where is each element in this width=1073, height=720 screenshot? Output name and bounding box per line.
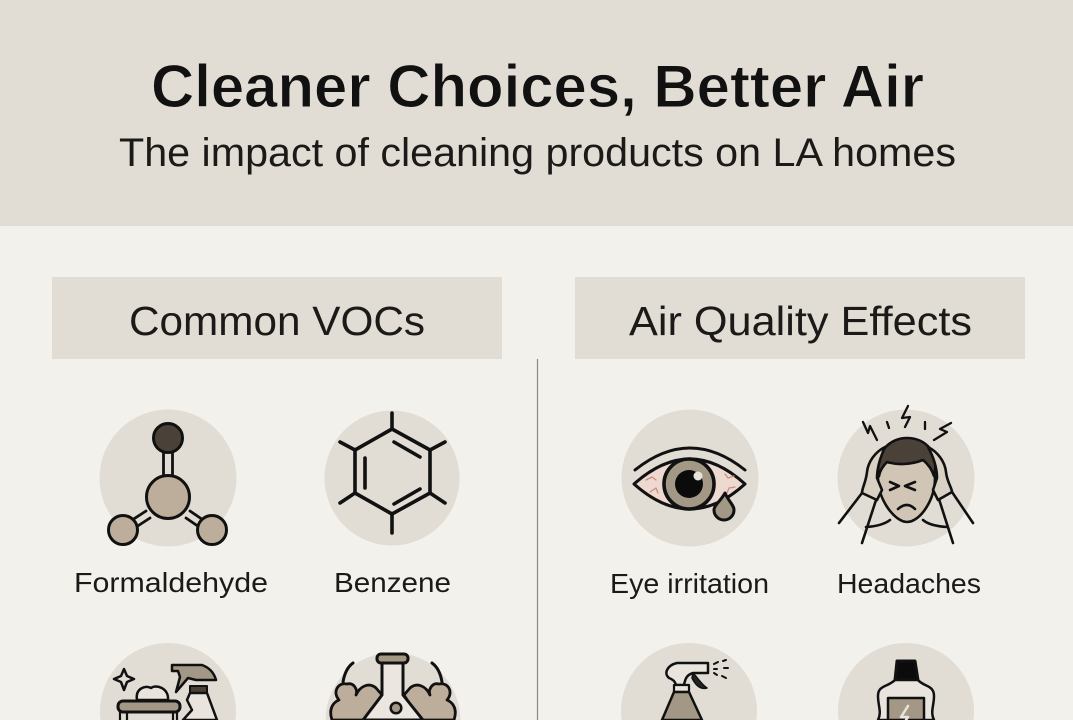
label: Benzene: Benzene bbox=[334, 567, 451, 598]
subtitle: The impact of cleaning products on LA homes bbox=[119, 131, 956, 175]
label: Formaldehyde: Formaldehyde bbox=[74, 567, 268, 598]
icon: irritated eye bbox=[622, 410, 758, 546]
panel heading: Common VOCs: Common VOCs bbox=[129, 298, 425, 344]
icon: formaldehyde molecule bbox=[100, 410, 236, 546]
label: Eye irritation: Eye irritation bbox=[610, 568, 769, 599]
panel heading: Common VOCs bbox=[52, 277, 502, 359]
icon: chemical bottle with warning bolt bbox=[838, 643, 974, 720]
icon: benzene ring bbox=[324, 410, 460, 546]
panel heading: Air Quality Effects: Air Quality Effects bbox=[629, 298, 972, 344]
label: Headaches: Headaches bbox=[837, 568, 981, 599]
icon: chemical flask with fumes bbox=[326, 653, 460, 720]
icon: person with headache bbox=[838, 406, 974, 546]
icon: spray bottle bbox=[621, 643, 757, 720]
icon: cleaning supplies bbox=[100, 643, 236, 720]
title: Cleaner Choices, Better Air bbox=[151, 53, 924, 120]
panel heading: Air Quality Effects bbox=[575, 277, 1025, 359]
